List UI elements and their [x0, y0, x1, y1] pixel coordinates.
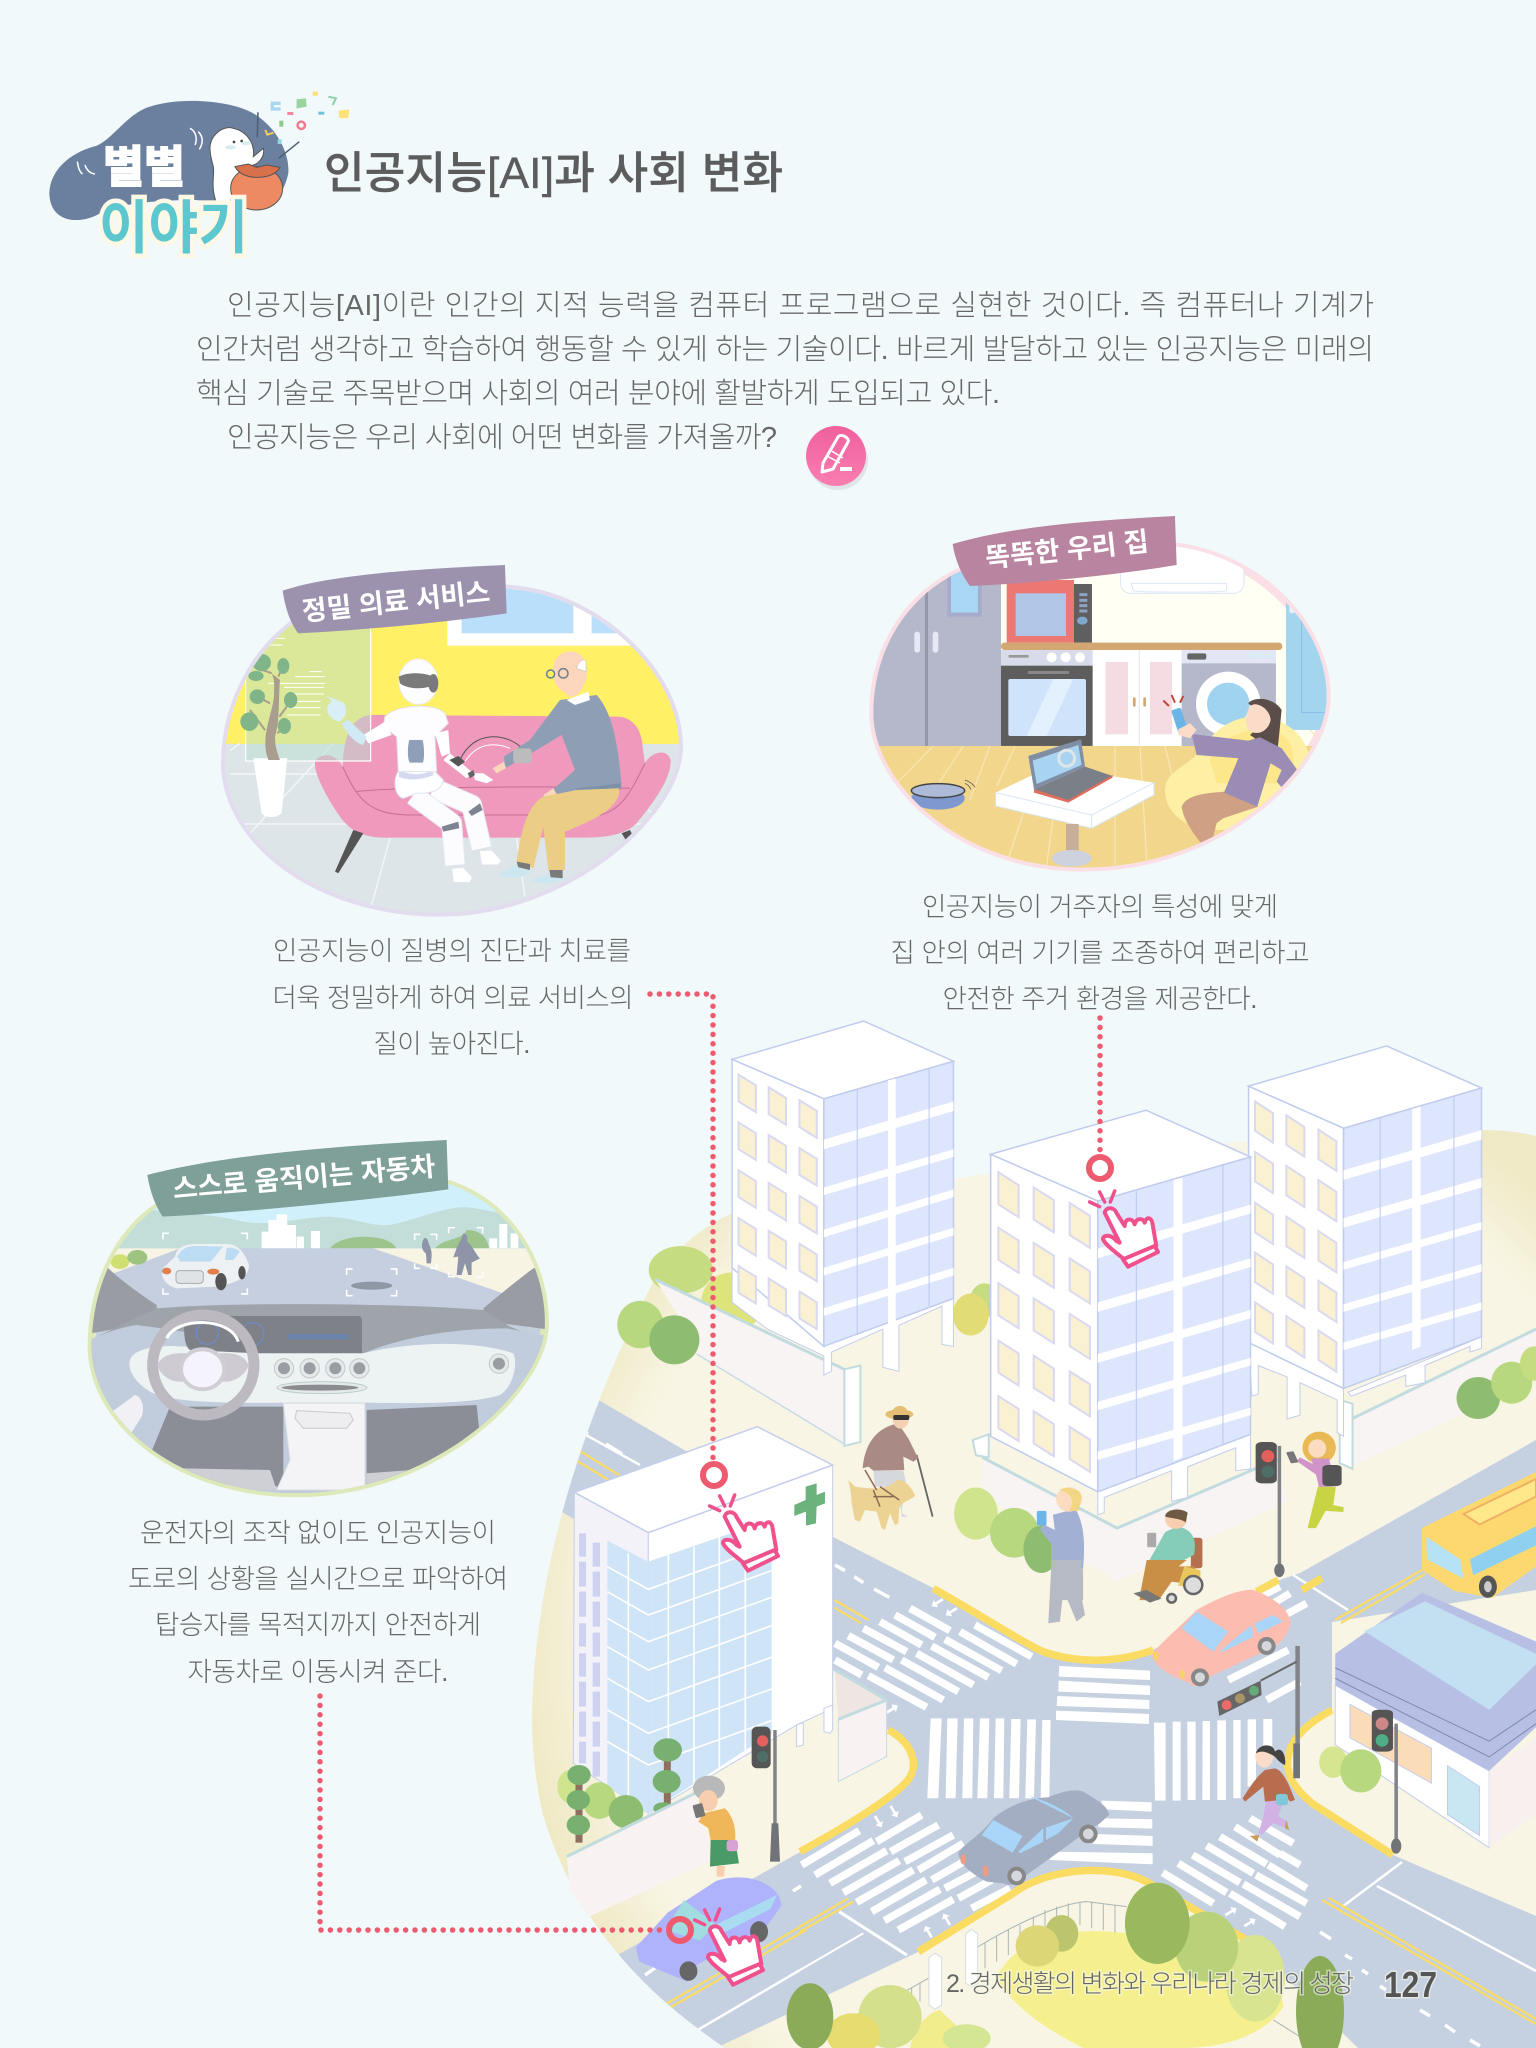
car: pink [1152, 1590, 1291, 1686]
caption: medical: 질이 높아진다. [374, 1029, 530, 1059]
upper city, walls and bushes [617, 1021, 1536, 1600]
caption: medical: 인공지능이 질병의 진단과 치료를 [273, 936, 631, 966]
apartment C [1249, 1343, 1344, 1436]
park [787, 1883, 1300, 2048]
caption: smart home: 집 안의 여러 기기를 조종하여 편리하고 [890, 938, 1310, 968]
apartment A [732, 1268, 953, 1375]
intro text: 인간처럼 생각하고 학습하여 행동할 수 있게 하는 기술이다. 바르게 발달하고 있는 인공지능은 미래의 [196, 333, 1374, 366]
icon: pencil [806, 426, 868, 490]
caption: self-driving car: 탑승자를 목적지까지 안전하게 [155, 1610, 481, 1640]
logo: 별별 이야기: 별별 [103, 143, 185, 192]
traffic light: hospital [752, 1727, 780, 1862]
hospital [557, 1406, 933, 1917]
panel: precise medical service [221, 565, 683, 916]
marker: hospital [703, 1464, 778, 1571]
marker: car [669, 1909, 763, 1985]
caption: medical: 더욱 정밀하게 하여 의료 서비스의 [272, 983, 634, 1013]
person: wheelchair user [1140, 1509, 1204, 1600]
other road markings [550, 1415, 1536, 2038]
panel: self-driving car: 스스로 움직이는 자동차 [171, 1152, 437, 1204]
person: blind man with dog [848, 1406, 933, 1530]
caption: self-driving car: 운전자의 조작 없이도 인공지능이 [140, 1518, 496, 1548]
person: woman with phone [1286, 1432, 1344, 1528]
logo: 별별 이야기 [49, 92, 349, 261]
dotted line: medical [650, 994, 713, 1458]
dotted line: car [320, 1696, 660, 1930]
wheelchair and legs [1133, 1560, 1202, 1603]
apartment B [982, 1457, 1287, 1582]
footer: 2. 경제생활의 변화와 우리나라 경제의 성장 [946, 1970, 1354, 1998]
footer [946, 1964, 1437, 2005]
shop building [636, 1472, 1536, 1982]
intro text: 인공지능은 우리 사회에 어떤 변화를 가져올까? [227, 422, 777, 454]
title: 인공지능[AI]과 사회 변화 [324, 149, 783, 198]
person: girl [1243, 1745, 1295, 1842]
panel: smart home: 똑똑한 우리 집 [984, 527, 1150, 573]
marker: apartment [1089, 1157, 1158, 1267]
caption: self-driving car: 도로의 상황을 실시간으로 파악하여 [128, 1564, 508, 1594]
caption: smart home [890, 892, 1310, 1014]
intro text: 인공지능[AI]이란 인간의 지적 능력을 컴퓨터 프로그램으로 실현한 것이다. 즉 컴퓨터나 기계가 [227, 290, 1374, 322]
caption: self-driving car: 자동차로 이동시켜 준다. [188, 1657, 448, 1687]
ground [500, 1100, 1536, 2048]
dotted line: home [1097, 1018, 1103, 1150]
intro text [196, 290, 1374, 454]
car: purple [636, 1877, 782, 1982]
person: old woman [692, 1776, 739, 1877]
panel: smart home [870, 516, 1330, 872]
intro text: 핵심 기술로 주목받으며 사회의 여러 분야에 활발하게 도입되고 있다. [196, 378, 1000, 410]
traffic light: left of apartments [1256, 1442, 1285, 1577]
roads [470, 1392, 1536, 2048]
panel: precise medical service: 정밀 의료 서비스 [301, 577, 491, 627]
intersection figures [958, 1560, 1300, 1885]
bus [1422, 1472, 1536, 1598]
city illustration [320, 994, 1536, 2048]
car: gray [958, 1790, 1109, 1885]
caption: medical [272, 936, 634, 1059]
logo: 별별 이야기: 이야기 [99, 196, 248, 261]
panel: self-driving car [88, 1140, 549, 1498]
person: man's legs [1048, 1560, 1085, 1623]
caption: smart home: 안전한 주거 환경을 제공한다. [942, 984, 1258, 1014]
caption: self-driving car [128, 1518, 508, 1687]
road markings [800, 1565, 1307, 1970]
traffic light: arm over intersection [1217, 1646, 1300, 1778]
caption: smart home: 인공지능이 거주자의 특성에 맞게 [922, 892, 1278, 922]
person: man with phone [1037, 1487, 1084, 1600]
footer: 127 [1384, 1964, 1437, 2005]
